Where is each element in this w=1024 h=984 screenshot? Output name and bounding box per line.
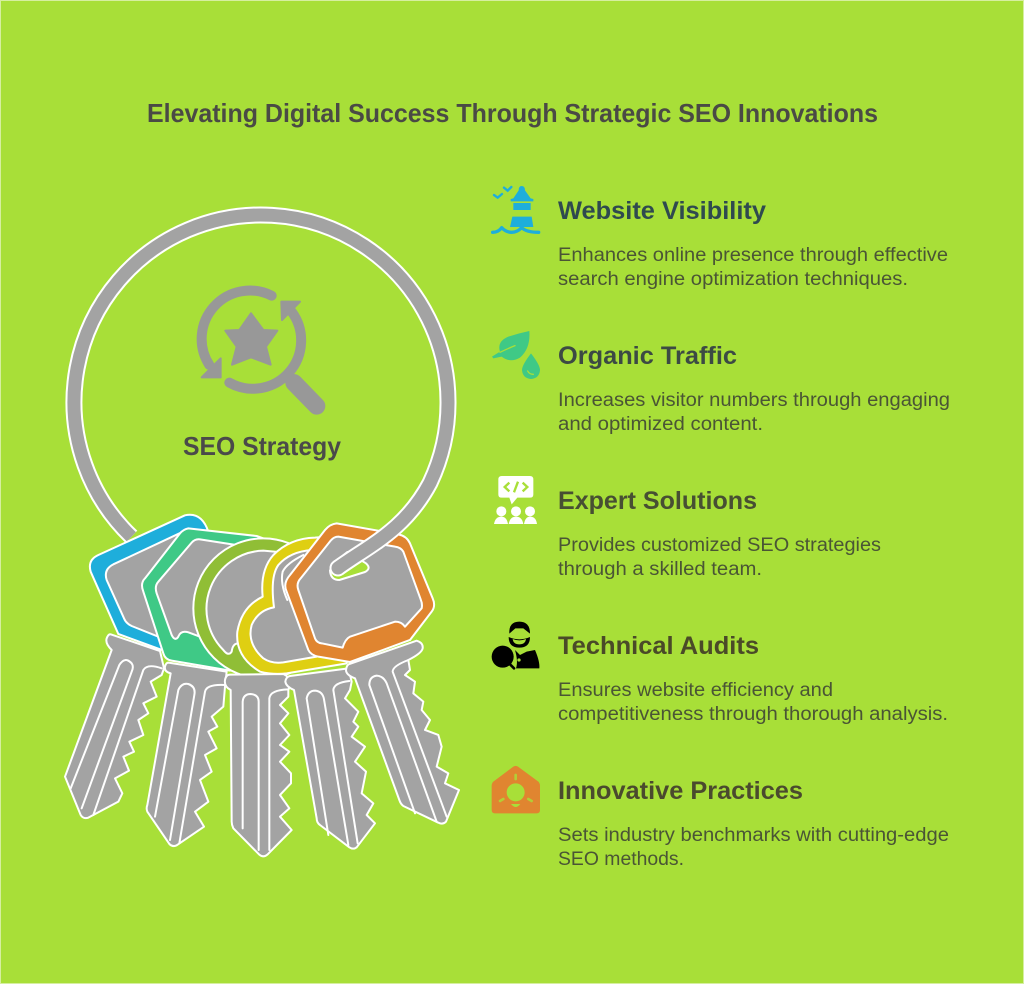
description: and optimized content.	[558, 414, 763, 435]
icon: magnifier with star and cycle arrows	[202, 291, 317, 406]
description	[558, 245, 948, 290]
item: Innovative Practices	[492, 766, 949, 870]
item: Organic Traffic	[492, 331, 950, 435]
heading: Organic Traffic	[558, 342, 737, 370]
description: Provides customized SEO strategies	[558, 535, 881, 556]
item: Technical Audits	[492, 622, 948, 725]
key ring end through orange tag	[330, 401, 448, 576]
description: SEO methods.	[558, 849, 684, 870]
description: Ensures website efficiency and	[558, 680, 833, 701]
heading: Expert Solutions	[558, 487, 757, 515]
item: Expert Solutions	[494, 476, 881, 580]
blue key tag	[90, 515, 208, 652]
icon: leaf and water drop	[492, 331, 540, 379]
item: Website Visibility	[493, 186, 948, 290]
description	[558, 535, 881, 580]
icon: house with light bulb	[492, 766, 540, 813]
heading: Innovative Practices	[558, 777, 803, 805]
icon: engineer with magnifier	[492, 622, 539, 668]
lime key tag	[193, 538, 333, 678]
description: competitiveness through thorough analysis.	[558, 704, 948, 725]
description: Sets industry benchmarks with cutting-edge	[558, 825, 949, 846]
title: Elevating Digital Success Through Strategic SEO Innovations	[147, 98, 878, 128]
heading: Technical Audits	[558, 632, 759, 660]
description	[558, 390, 950, 435]
description: through a skilled team.	[558, 559, 762, 580]
green key tag	[142, 528, 277, 671]
key ring	[74, 215, 448, 537]
description	[558, 680, 948, 725]
green key blade	[147, 663, 227, 846]
icon: lighthouse	[493, 186, 539, 232]
key bunch	[65, 515, 459, 856]
blue key blade	[65, 634, 164, 818]
icon: code speech bubble and team	[494, 476, 537, 524]
heading: Website Visibility	[558, 197, 766, 225]
description: Increases visitor numbers through engaging	[558, 390, 950, 411]
orange key blade	[346, 641, 459, 824]
lime key blade	[225, 674, 292, 856]
orange key tag	[285, 523, 434, 662]
yellow key blade	[285, 668, 375, 849]
center label: SEO Strategy	[183, 431, 342, 461]
description: search engine optimization techniques.	[558, 269, 908, 290]
description	[558, 825, 949, 870]
yellow key tag	[237, 537, 353, 674]
description: Enhances online presence through effective	[558, 245, 948, 266]
